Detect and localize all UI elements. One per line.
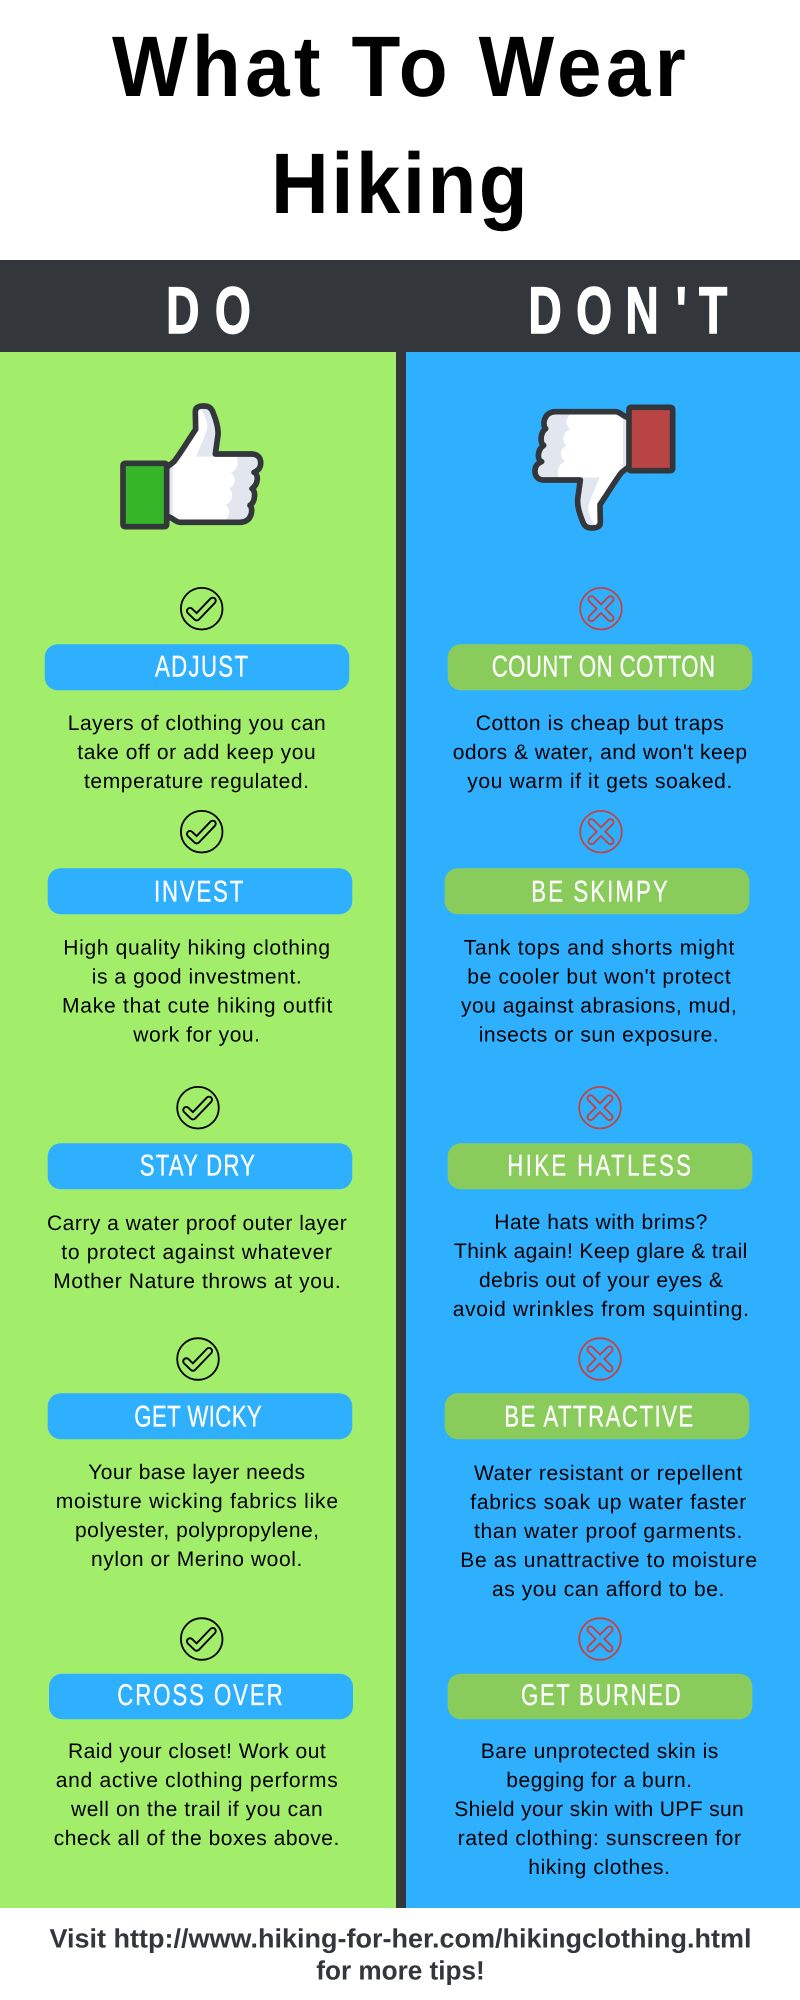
- label pill: cross over: CROSS OVER: [117, 1679, 283, 1712]
- label pill: cross over: [49, 1674, 353, 1719]
- panel: do column: [0, 352, 396, 1908]
- text: be skimpy: you against abrasions, mud,: [461, 994, 737, 1017]
- text: be attractive: [460, 1462, 757, 1601]
- label pill: hike hatless: [448, 1143, 752, 1189]
- text: adjust: temperature regulated.: [84, 770, 309, 793]
- item: get burned: [448, 1618, 752, 1879]
- item: be skimpy: [445, 811, 749, 1046]
- label pill: hike hatless: HIKE HATLESS: [507, 1150, 691, 1183]
- label pill: be skimpy: BE SKIMPY: [531, 875, 668, 908]
- text: count on cotton: you warm if it gets soaked.: [467, 770, 732, 793]
- label pill: adjust: [45, 644, 349, 690]
- icon: cross: [579, 1087, 621, 1128]
- divider between columns: [396, 352, 406, 1908]
- text: stay dry: Carry a water proof outer layer: [47, 1212, 347, 1235]
- item: stay dry: [47, 1087, 352, 1293]
- icon: cross: [580, 588, 622, 630]
- text: get wicky: polyester, polypropylene,: [75, 1519, 319, 1542]
- icon: check: [181, 588, 222, 630]
- label pill: get wicky: GET WICKY: [134, 1401, 262, 1434]
- label pill: get burned: [448, 1674, 752, 1719]
- title: What To Wear: [112, 19, 686, 115]
- text: stay dry: [47, 1212, 347, 1293]
- text: stay dry: to protect against whatever: [61, 1241, 332, 1264]
- text: be attractive: Water resistant or repellent: [474, 1462, 742, 1485]
- label pill: stay dry: [48, 1143, 352, 1189]
- text: hike hatless: Hate hats with brims?: [494, 1211, 707, 1234]
- label pill: invest: [48, 868, 352, 914]
- footer call to action: [50, 1924, 752, 1985]
- text: hike hatless: debris out of your eyes &: [479, 1269, 723, 1292]
- text: be skimpy: be cooler but won't protect: [467, 965, 731, 988]
- text: stay dry: Mother Nature throws at you.: [53, 1270, 341, 1293]
- label pill: invest: INVEST: [154, 875, 243, 908]
- icon: cross: [579, 1618, 621, 1660]
- title: Hiking: [271, 136, 528, 232]
- text: count on cotton: [453, 712, 747, 793]
- item: adjust: [45, 588, 349, 793]
- panel: don't column: [406, 352, 800, 1908]
- text: get wicky: Your base layer needs: [88, 1461, 305, 1484]
- item: invest: [48, 811, 352, 1046]
- item: get wicky: [48, 1338, 352, 1571]
- text: get wicky: nylon or Merino wool.: [91, 1548, 302, 1571]
- title: [112, 19, 686, 232]
- label pill: count on cotton: [448, 644, 752, 690]
- text: get wicky: [56, 1461, 338, 1571]
- text: get burned: [454, 1740, 744, 1879]
- text: hike hatless: [453, 1211, 749, 1321]
- label pill: stay dry: STAY DRY: [140, 1150, 255, 1183]
- text: adjust: take off or add keep you: [77, 741, 316, 764]
- label pill: get burned: GET BURNED: [521, 1679, 681, 1712]
- label pill: be attractive: [445, 1393, 749, 1439]
- item: cross over: [49, 1618, 353, 1850]
- text: get burned: begging for a burn.: [506, 1769, 692, 1792]
- text: invest: work for you.: [132, 1023, 260, 1046]
- text: get wicky: moisture wicking fabrics like: [56, 1490, 338, 1513]
- text: get burned: Bare unprotected skin is: [481, 1740, 718, 1763]
- item: count on cotton: [448, 588, 752, 793]
- text: be attractive: than water proof garments.: [474, 1520, 742, 1543]
- text: be skimpy: Tank tops and shorts might: [464, 936, 734, 959]
- item: be attractive: [445, 1338, 757, 1601]
- icon: thumbs up: [123, 406, 263, 527]
- heading: don't: DON'T: [528, 273, 727, 347]
- text: get burned: hiking clothes.: [528, 1856, 670, 1879]
- header band: do and don't: [0, 260, 800, 352]
- footer call to action: Visit http://www.hiking-for-her.com/hikingclothing.html: [50, 1924, 752, 1954]
- text: be attractive: fabrics soak up water faster: [470, 1491, 746, 1514]
- text: be attractive: as you can afford to be.: [492, 1578, 724, 1601]
- text: invest: High quality hiking clothing: [63, 936, 330, 959]
- label pill: adjust: ADJUST: [155, 651, 248, 684]
- text: cross over: [54, 1740, 339, 1850]
- text: cross over: check all of the boxes above.: [54, 1827, 339, 1850]
- text: invest: is a good investment.: [92, 965, 302, 988]
- text: adjust: Layers of clothing you can: [68, 712, 326, 735]
- text: count on cotton: odors & water, and won't keep: [453, 741, 747, 764]
- icon: cross: [579, 1338, 621, 1380]
- icon: check: [177, 1338, 219, 1380]
- text: get burned: Shield your skin with UPF sun: [454, 1798, 744, 1821]
- text: be skimpy: insects or sun exposure.: [479, 1023, 719, 1046]
- item: hike hatless: [448, 1087, 752, 1321]
- text: invest: [62, 936, 332, 1046]
- text: count on cotton: Cotton is cheap but traps: [476, 712, 724, 735]
- icon: check: [181, 1618, 222, 1660]
- text: hike hatless: avoid wrinkles from squinting.: [453, 1298, 749, 1321]
- label pill: get wicky: [48, 1393, 352, 1439]
- text: cross over: well on the trail if you can: [70, 1798, 323, 1821]
- icon: check: [177, 1087, 219, 1128]
- icon: cross: [580, 811, 622, 852]
- label pill: be attractive: BE ATTRACTIVE: [504, 1401, 693, 1434]
- icon: thumbs down: [532, 407, 673, 528]
- text: cross over: Raid your closet! Work out: [68, 1740, 326, 1763]
- label pill: be skimpy: [445, 868, 749, 914]
- text: hike hatless: Think again! Keep glare & trail: [454, 1240, 747, 1263]
- text: adjust: [68, 712, 326, 793]
- heading: do: DO: [166, 273, 251, 347]
- icon: check: [181, 811, 222, 852]
- footer call to action: for more tips!: [316, 1955, 485, 1985]
- text: invest: Make that cute hiking outfit: [62, 994, 332, 1017]
- text: cross over: and active clothing performs: [56, 1769, 338, 1792]
- text: be skimpy: [461, 936, 737, 1046]
- text: be attractive: Be as unattractive to moisture: [460, 1549, 757, 1572]
- text: get burned: rated clothing: sunscreen for: [458, 1827, 741, 1850]
- label pill: count on cotton: COUNT ON COTTON: [492, 651, 715, 684]
